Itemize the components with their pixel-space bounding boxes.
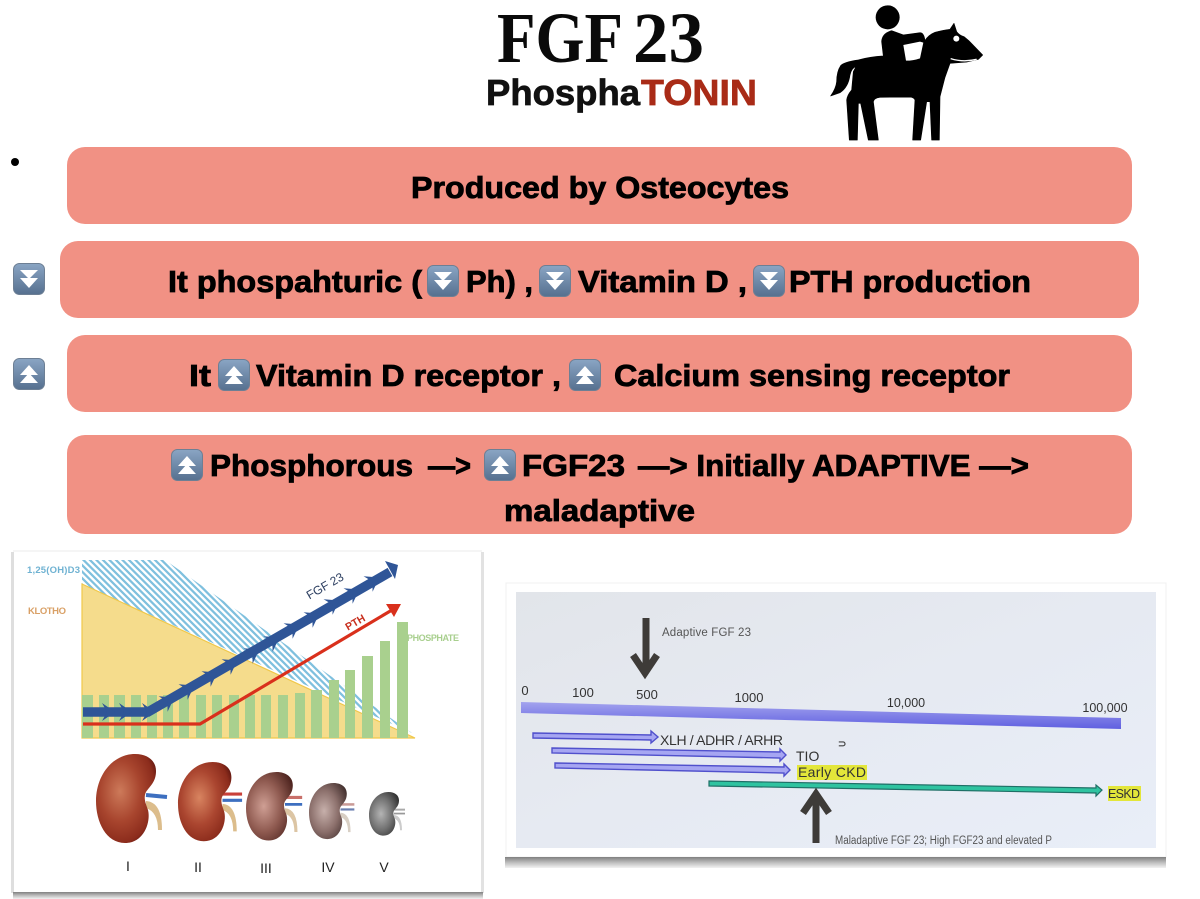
chart: FGF 23 arrow [83,561,398,721]
title: FGF 23 [497,0,704,78]
panel: CKD progression chart [11,550,484,899]
scale numbers: 100 [572,685,594,700]
chart: falling klotho area [82,584,415,738]
scale numbers [521,683,1128,715]
panel: phosphaturic effects [60,241,1139,318]
scale numbers: 10,000 [887,696,925,710]
chart: falling vitamin D area [82,560,412,733]
label: adaptive FGF 23: Adaptive FGF 23 [662,627,751,639]
subtitle: PhosphaTONIN: TONIN [641,72,757,113]
panel: receptor effects [67,335,1132,412]
subtitle: PhosphaTONIN: Phospha [486,72,641,113]
arrow: XLH range [533,731,658,743]
label: KLOTHO: KLOTHO [28,606,66,617]
stage labels: IV [321,859,335,875]
arrow: maladaptive up arrow [803,794,829,843]
panel: phosphaturic effects: It phospahturic ( [168,264,423,299]
scale numbers: 500 [636,687,658,702]
panel: produced by osteocytes: Produced by Osteocytes [411,170,789,205]
icon: double down [14,264,44,294]
stage labels: I [126,858,130,874]
panel: phosphorous cascade [67,435,1132,534]
panel: phosphorous cascade: maladaptive [504,493,695,528]
kidney II [178,762,242,841]
kidney III [246,772,302,841]
scale numbers: 100,000 [1082,701,1128,715]
kidney IV [309,783,354,839]
small mark: ⊃ [838,739,846,750]
panel: phosphorous cascade: Phosphorous [210,448,413,483]
panel: phosphorous cascade: —> Initially ADAPTIVE —> [638,448,1029,483]
kidney I [96,754,167,843]
label: FGF 23: FGF 23 [304,570,346,602]
panel: phosphaturic effects: Vitamin D , [578,264,747,299]
stage labels [126,858,389,876]
arrow: early CKD range [555,763,790,776]
label: early CKD: Early CKD [798,764,866,780]
label: TIO: TIO [796,748,819,764]
label: 1,25(OH)D3: 1,25(OH)D3 [27,565,80,576]
chart: PTH arrow [83,604,401,724]
label: PHOSPHATE: PHOSPHATE [407,633,459,643]
arrow: TIO range [552,748,786,761]
label: XLH / ADHR / ARHR: XLH / ADHR / ARHR [660,732,783,748]
panel: receptor effects: It [189,358,211,393]
stage labels: III [260,860,272,876]
scale numbers: 1000 [735,690,763,705]
label: PTH: PTH [343,612,368,633]
chart: phosphate bars [82,622,408,738]
panel: phosphorous cascade: —> [428,448,471,483]
title: FGF 23: 23 [633,0,704,78]
panel: FGF23 level scale photo [505,583,1166,868]
stage labels: V [379,859,389,875]
title: FGF 23: FGF [497,0,623,78]
blue FGF23 scale bar [521,702,1121,729]
panel: phosphaturic effects: Ph) , [466,264,533,299]
panel: phosphaturic effects: PTH production [789,264,1031,299]
label: ESKD: ESKD [1108,787,1140,801]
subtitle: PhosphaTONIN [486,72,757,113]
panel: receptor effects: Vitamin D receptor , [256,358,561,393]
panel: produced by osteocytes [67,147,1132,224]
panel: receptor effects: Calcium sensing receptor [614,358,1010,393]
label: maladaptive FGF 23: Maladaptive FGF 23; High FGF23 and elevated P [835,835,1052,847]
arrow: adaptive down arrow [633,618,657,673]
stage labels: II [194,859,202,875]
arrow: ESKD range [709,781,1102,796]
kidney V [369,792,405,836]
panel: phosphorous cascade: FGF23 [522,448,625,483]
scale numbers: 0 [521,683,529,698]
icon: double up [14,358,44,390]
icon: horse and rider [831,5,983,140]
bullet [11,158,19,166]
